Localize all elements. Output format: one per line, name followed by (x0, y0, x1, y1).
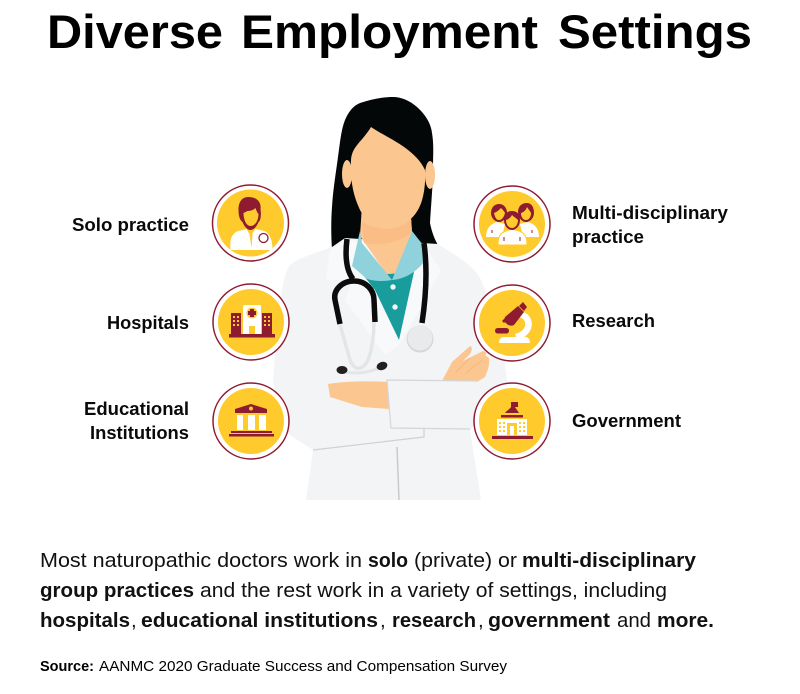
icon: multi-disciplinary practice (474, 186, 550, 262)
description text: research (392, 609, 476, 632)
label: educational institutions: Institutions (90, 422, 189, 443)
description text: government (488, 609, 610, 632)
description text: group practices (40, 579, 194, 602)
label: educational institutions: Educational (84, 398, 189, 419)
source: AANMC 2020 Graduate Success and Compensation Survey (99, 658, 508, 675)
label: multi-disciplinary practice: Multi-disciplinary (572, 202, 729, 223)
description text: solo (368, 549, 408, 572)
title (47, 5, 752, 58)
coat lapels (326, 240, 441, 355)
description text: and (617, 609, 651, 632)
title: Settings (558, 5, 752, 58)
icon: hospitals (213, 284, 289, 360)
description text: multi-disciplinary (522, 549, 697, 572)
icon: solo practice (212, 185, 288, 261)
description text: Most naturopathic doctors work in (40, 549, 362, 572)
description text: hospitals (40, 609, 130, 632)
icon: educational institutions (213, 383, 289, 459)
label: multi-disciplinary practice: practice (572, 226, 644, 247)
description text: and the rest work in a variety of settings, including (200, 579, 667, 602)
title: Diverse (47, 5, 223, 58)
hair (331, 97, 438, 265)
hand (442, 346, 489, 382)
doctor illustration (273, 97, 508, 500)
sleeve (387, 380, 477, 429)
label: multi-disciplinary practice (572, 202, 729, 247)
description text: more. (657, 609, 714, 632)
coat hem lines (313, 429, 424, 450)
teal shirt (364, 272, 414, 340)
face (351, 127, 425, 229)
neck (360, 205, 412, 282)
description text: , (380, 609, 386, 632)
source: Source: (40, 658, 94, 675)
stethoscope (335, 239, 426, 373)
icon: research (474, 285, 550, 361)
lab coat (273, 238, 508, 500)
description text: , (478, 609, 484, 632)
description text (40, 549, 714, 632)
forearm (328, 381, 389, 409)
description text: (private) or (414, 549, 517, 572)
ears (342, 160, 352, 188)
label: educational institutions (84, 398, 189, 443)
collar (352, 231, 392, 281)
label: hospitals: Hospitals (107, 312, 189, 333)
icon: government (474, 383, 550, 459)
label: government: Government (572, 410, 681, 431)
label: solo practice: Solo practice (72, 214, 189, 235)
description text: educational institutions (141, 609, 378, 632)
description text: , (131, 609, 137, 632)
label: research: Research (572, 310, 655, 331)
title: Employment (241, 5, 538, 58)
